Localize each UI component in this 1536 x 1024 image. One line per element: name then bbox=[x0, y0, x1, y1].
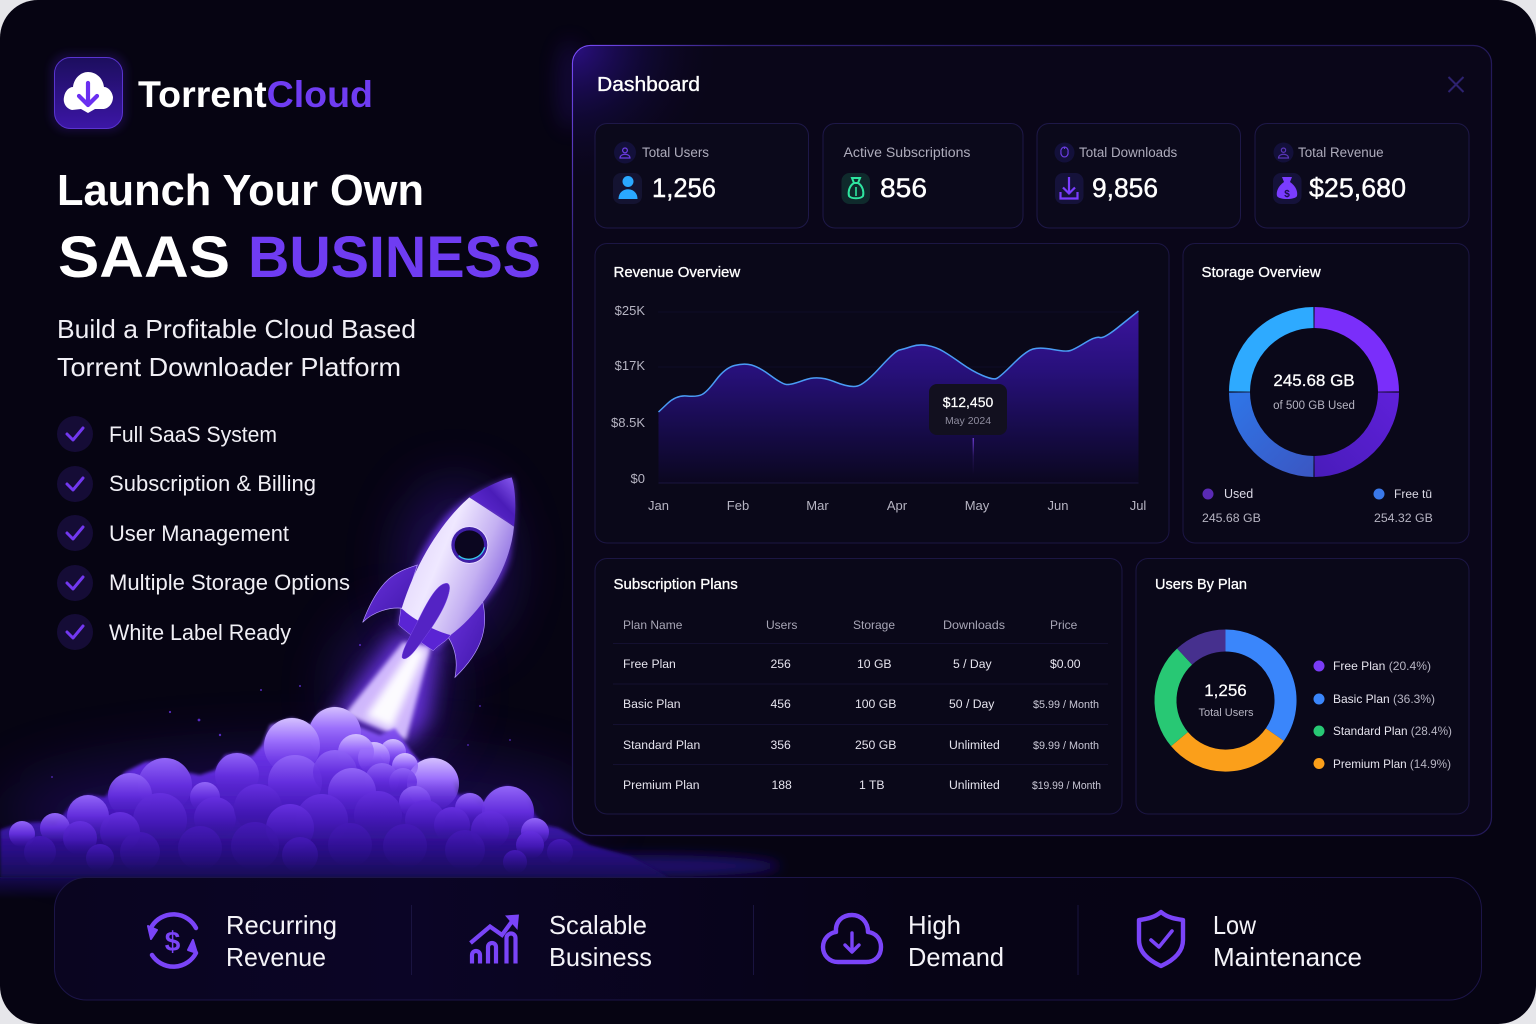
donut centre text bbox=[1273, 371, 1355, 412]
headline: BUSINESS bbox=[248, 225, 541, 290]
revenue heading: Revenue Overview bbox=[614, 264, 740, 281]
row: premium: Premium Plan bbox=[623, 778, 700, 792]
benefit: scalable business: Business bbox=[549, 942, 652, 972]
plan legend bbox=[1314, 659, 1452, 771]
stat card: active subscriptions bbox=[823, 124, 1023, 228]
item: full saas: Full SaaS System bbox=[109, 422, 277, 447]
benefit: low maintenance bbox=[1139, 910, 1362, 972]
row: standard: 250 GB bbox=[855, 738, 896, 752]
row: standard: Standard Plan bbox=[623, 738, 700, 752]
row: free: 5 / Day bbox=[953, 657, 993, 671]
icon: shield check bbox=[1139, 912, 1183, 966]
icon: recurring dollar: $ bbox=[165, 926, 181, 957]
row: basic: Basic Plan bbox=[623, 697, 681, 711]
row: premium: 188 bbox=[772, 778, 792, 792]
legend: free bbox=[1374, 487, 1433, 525]
y axis labels: $0 bbox=[631, 471, 645, 486]
plans heading: Subscription Plans bbox=[614, 576, 738, 593]
brand name: TorrentCloud bbox=[138, 74, 373, 115]
x axis labels: Feb bbox=[727, 498, 749, 513]
benefit: scalable business: Scalable bbox=[549, 910, 647, 940]
row: basic: 100 GB bbox=[855, 697, 896, 711]
legend: free: 254.32 GB bbox=[1374, 511, 1433, 525]
panel: subscription plans bbox=[595, 558, 1122, 814]
headline bbox=[57, 166, 541, 290]
stat card: total users: Total Users bbox=[642, 145, 709, 160]
item: storage bbox=[57, 565, 350, 601]
tooltip: $12,450 bbox=[943, 394, 994, 410]
panel: benefits bar bbox=[54, 878, 1482, 1000]
stat card: active subscriptions: Active Subscriptions bbox=[844, 145, 971, 160]
y axis labels: $8.5K bbox=[611, 415, 645, 430]
y axis labels bbox=[611, 303, 645, 486]
stat card: total revenue: $25,680 bbox=[1309, 173, 1406, 203]
item: white label: White Label Ready bbox=[109, 620, 291, 645]
plan legend: Free Plan (20.4%) bbox=[1333, 659, 1431, 673]
item: user management: User Management bbox=[109, 521, 289, 546]
benefit: scalable business bbox=[470, 910, 652, 972]
logo badge bbox=[50, 53, 127, 132]
item: white label bbox=[57, 614, 291, 650]
row: basic bbox=[623, 697, 1099, 711]
panel: dashboard bbox=[556, 40, 1492, 836]
stat card: total users bbox=[595, 124, 808, 228]
x axis labels: May bbox=[965, 498, 990, 513]
icon: close bbox=[1448, 77, 1464, 92]
stat card: active subscriptions: 856 bbox=[880, 173, 927, 203]
benefit: high demand: High bbox=[908, 910, 961, 940]
plan legend: Premium Plan (14.9%) bbox=[1333, 757, 1451, 771]
row: premium bbox=[623, 778, 1101, 792]
row: premium: Unlimited bbox=[949, 778, 1000, 792]
row: free bbox=[623, 657, 1081, 671]
legend: used: 245.68 GB bbox=[1202, 511, 1261, 525]
legend: used bbox=[1202, 487, 1261, 525]
legend: free: Free tū bbox=[1394, 487, 1432, 501]
x axis labels: Apr bbox=[887, 498, 908, 513]
benefit: low maintenance: Low bbox=[1213, 910, 1256, 940]
table header: Storage bbox=[853, 618, 895, 632]
y axis labels: $25K bbox=[615, 303, 645, 318]
table header: Plan Name bbox=[623, 618, 683, 632]
benefit: recurring revenue bbox=[148, 910, 337, 972]
legend: used: Used bbox=[1224, 487, 1253, 501]
item: subscription bbox=[57, 466, 316, 502]
row: basic: $5.99 / Month bbox=[1033, 699, 1099, 711]
brand logo bbox=[50, 53, 373, 132]
stat card: total downloads bbox=[1037, 124, 1240, 228]
row: free: 10 GB bbox=[857, 657, 892, 671]
stat card: total downloads: 9,856 bbox=[1092, 173, 1158, 203]
plan donut bbox=[1165, 640, 1286, 761]
exhaust flame bbox=[332, 632, 440, 745]
donut centre text: of 500 GB Used bbox=[1273, 400, 1355, 412]
row: basic: 50 / Day bbox=[949, 697, 995, 711]
feature checklist bbox=[57, 416, 350, 650]
row: premium: 1 TB bbox=[859, 778, 885, 792]
stat card: total revenue: $ bbox=[1284, 189, 1290, 200]
x axis labels bbox=[648, 498, 1146, 513]
tooltip bbox=[929, 384, 1007, 435]
icon: cloud download bbox=[823, 915, 881, 962]
x axis labels: Mar bbox=[806, 498, 829, 513]
donut centre text: 1,256 bbox=[1204, 681, 1247, 700]
storage donut bbox=[1240, 318, 1388, 466]
subtitle: Torrent Downloader Platform bbox=[57, 352, 401, 382]
icon: recurring dollar bbox=[148, 914, 197, 967]
smoke cloud bbox=[0, 707, 780, 899]
donut centre text bbox=[1198, 681, 1254, 719]
item: subscription: Subscription & Billing bbox=[109, 471, 316, 496]
dashboard title: Dashboard bbox=[597, 74, 700, 96]
subtitle bbox=[57, 314, 416, 382]
panel: users by plan bbox=[1136, 558, 1469, 814]
table header: Downloads bbox=[943, 618, 1005, 632]
panel: storage overview bbox=[1183, 244, 1469, 543]
row: premium: $19.99 / Month bbox=[1032, 780, 1101, 792]
stat card: total users: 1,256 bbox=[652, 173, 716, 203]
stat card: total downloads: Total Downloads bbox=[1079, 145, 1178, 160]
row: free: $0.00 bbox=[1050, 657, 1081, 671]
row: standard: Unlimited bbox=[949, 738, 1000, 752]
row: basic: 456 bbox=[770, 697, 791, 711]
donut centre text: Total Users bbox=[1198, 707, 1254, 719]
benefit: low maintenance: Maintenance bbox=[1213, 942, 1362, 972]
row: free: Free Plan bbox=[623, 657, 676, 671]
item: full saas bbox=[57, 416, 277, 452]
headline: SAAS bbox=[58, 225, 230, 290]
row: free: 256 bbox=[770, 657, 791, 671]
x axis labels: Jan bbox=[648, 498, 669, 513]
row: standard: 356 bbox=[770, 738, 791, 752]
illustration: rocket launch with cloud bbox=[0, 477, 780, 899]
benefit: recurring revenue: Recurring bbox=[226, 910, 337, 940]
benefit: high demand: Demand bbox=[908, 942, 1004, 972]
plan legend: Basic Plan (36.3%) bbox=[1333, 692, 1435, 706]
table header bbox=[623, 618, 1078, 632]
storage heading: Storage Overview bbox=[1202, 264, 1321, 281]
donut centre text: 245.68 GB bbox=[1273, 371, 1355, 390]
panel: revenue overview bbox=[595, 244, 1169, 543]
plan legend: Standard Plan (28.4%) bbox=[1333, 724, 1452, 738]
users by plan heading: Users By Plan bbox=[1155, 576, 1247, 593]
benefit: recurring revenue: Revenue bbox=[226, 942, 326, 972]
tooltip: May 2024 bbox=[945, 415, 991, 427]
row: standard: $9.99 / Month bbox=[1033, 740, 1099, 752]
y axis labels: $17K bbox=[615, 358, 645, 373]
subtitle: Build a Profitable Cloud Based bbox=[57, 314, 416, 344]
stat card: total revenue bbox=[1255, 124, 1469, 228]
table header: Users bbox=[766, 618, 797, 632]
table header: Price bbox=[1050, 618, 1078, 632]
area line chart bbox=[658, 311, 1138, 483]
row: standard bbox=[623, 738, 1099, 752]
headline: Launch Your Own bbox=[57, 166, 424, 215]
item: user management bbox=[57, 515, 289, 551]
icon: growth chart bbox=[470, 914, 519, 964]
x axis labels: Jul bbox=[1130, 498, 1146, 513]
rocket bbox=[363, 477, 515, 677]
item: storage: Multiple Storage Options bbox=[109, 570, 350, 595]
x axis labels: Jun bbox=[1048, 498, 1068, 513]
sparkles bbox=[51, 644, 511, 778]
stat card: total revenue: Total Revenue bbox=[1298, 145, 1384, 160]
benefit: high demand bbox=[823, 910, 1004, 972]
